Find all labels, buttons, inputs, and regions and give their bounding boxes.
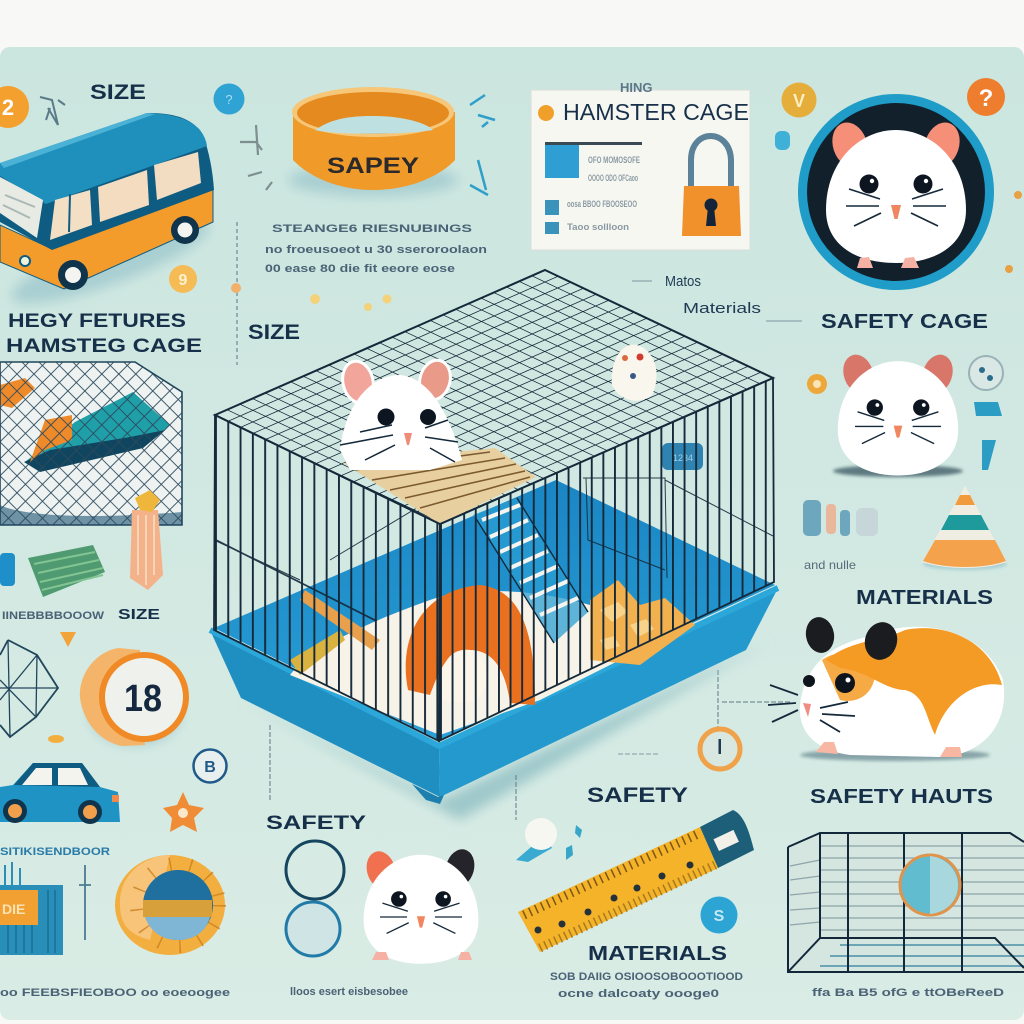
icons: right of ring	[470, 95, 495, 195]
icon: blue tag	[775, 131, 790, 150]
badge: yellow number: 9	[179, 272, 188, 289]
small label: and nulle	[804, 558, 856, 572]
card blue square	[545, 142, 579, 178]
badge: blue spiral: S	[714, 908, 725, 925]
heading: features: HAMSTEG CAGE	[6, 336, 202, 357]
info card	[531, 80, 750, 250]
small hamster	[612, 345, 657, 401]
mid-labels: Materials	[683, 300, 761, 317]
top mesh	[215, 270, 773, 524]
icon: tassel	[130, 490, 163, 590]
heading: safety centre: SAFETY	[587, 784, 688, 807]
description text: 00 ease 80 die fit eeore eose	[265, 263, 455, 275]
label: size left: SIZE	[118, 606, 160, 623]
orange stick	[300, 590, 380, 650]
blue box	[0, 862, 63, 955]
small caption under cage	[618, 753, 660, 755]
materials text: ocne dalcoaty oooge0	[558, 988, 719, 1000]
badge: blue spiral	[700, 896, 738, 934]
heading: safety hauts: SAFETY HAUTS	[810, 786, 993, 808]
description text: no froeusoeot u 30 sseroroolaon	[265, 244, 487, 256]
tray	[210, 480, 778, 804]
badge: orange 2: 2	[2, 95, 14, 120]
card text	[567, 155, 640, 232]
ladder	[473, 498, 588, 643]
card text: Taoo sollloon	[567, 222, 629, 232]
icon: blue-orange bits	[803, 500, 878, 536]
icon: sparks	[240, 125, 272, 190]
heading: features: HEGY FETURES	[8, 311, 186, 332]
hay piece	[290, 630, 345, 675]
heading: size middle: SIZE	[248, 321, 300, 344]
label: size left	[2, 606, 160, 623]
badge: small orange	[807, 374, 827, 394]
ring text: SAPEY	[327, 153, 419, 178]
bottom caption left: oo FEEBSFIEOBOO oo eoeoogee	[0, 987, 230, 999]
badge: blue outlined	[194, 750, 226, 782]
materials text	[550, 971, 743, 1000]
label: left small blue: SITIKISENDBOOR	[0, 846, 110, 858]
badge: yellow number	[169, 265, 197, 293]
wooden plank	[343, 448, 536, 524]
heading: features	[6, 311, 202, 357]
badge: orange question	[967, 78, 1005, 116]
heading: safety left: SAFETY	[266, 813, 366, 834]
blue tag: 1234	[673, 453, 693, 463]
mid-labels	[632, 273, 802, 321]
card text: OOOO ODO OFCaoo	[588, 173, 638, 183]
description text: STEANGE6 RIESNUBINGS	[272, 223, 472, 235]
orange hamster	[768, 615, 1004, 761]
blue tag	[662, 443, 703, 470]
small marks: right edge	[1005, 191, 1022, 273]
badge: orange 2	[0, 86, 29, 128]
heading: safety cage: SAFETY CAGE	[821, 311, 988, 333]
icon: small sprig	[40, 97, 65, 125]
number ring	[80, 648, 186, 746]
main cage	[210, 270, 778, 820]
bottom caption right: ffa Ba B5 ofG e ttOBeReeD	[812, 987, 1004, 999]
hamster portrait	[798, 94, 994, 290]
small cage	[788, 833, 1024, 972]
card text: oosa BBOO FBOOSEOO	[567, 199, 637, 209]
mid-labels: Matos	[665, 273, 701, 290]
card text: OFO MOMOSOFE	[588, 155, 640, 165]
icon: small pin	[79, 865, 91, 940]
materials text: SOB DAIIG OSIOOSOBOOOTIOOD	[550, 971, 743, 983]
cage hamster	[339, 357, 462, 470]
connector: bottom	[270, 725, 516, 820]
number ring: 18	[124, 678, 162, 720]
back wire walls	[214, 478, 773, 653]
badge: pale circle	[969, 356, 1003, 390]
badge: orange question: ?	[979, 85, 993, 112]
icon: bus	[0, 113, 216, 319]
round porthole	[900, 855, 960, 915]
icon: padlock	[682, 136, 741, 236]
badge: yellow v: V	[793, 91, 805, 111]
badge: blue outlined: B	[204, 759, 216, 776]
icon: star	[163, 792, 204, 832]
blue box: DIE	[2, 901, 25, 917]
heading: materials centre: MATERIALS	[588, 942, 727, 965]
car	[0, 763, 120, 824]
icon: white knob	[516, 818, 582, 862]
icon: dot orange	[48, 735, 64, 743]
net panel	[0, 362, 182, 525]
hamster: right	[833, 351, 963, 477]
badge: blue circle	[214, 84, 244, 114]
bedding	[290, 591, 680, 735]
front bars: right	[439, 378, 774, 741]
description text	[265, 223, 487, 275]
icon: key ring	[286, 841, 344, 956]
card kicker: HING	[620, 80, 652, 95]
card rule	[545, 142, 642, 145]
card small icons	[545, 200, 559, 234]
icon: small gauge	[700, 729, 740, 769]
decorative dots	[310, 294, 392, 311]
badge: yellow v	[782, 82, 816, 118]
badge: blue circle: ?	[225, 92, 233, 107]
heading: materials right: MATERIALS	[856, 587, 993, 609]
icon: wire shape	[0, 640, 58, 737]
icon: blue marks	[974, 402, 1002, 470]
icon: striped cone	[922, 486, 1007, 570]
tray shadow	[241, 640, 770, 820]
food pile	[590, 580, 695, 665]
orange tunnel	[406, 585, 535, 705]
dashed line	[231, 222, 241, 365]
hamster bottom	[363, 845, 478, 964]
front bars: left	[214, 415, 440, 741]
safety ring	[288, 87, 458, 196]
log ring	[115, 855, 225, 955]
icon: green block	[28, 545, 105, 597]
card bullet	[538, 105, 554, 121]
card title: HAMSTER CAGE	[563, 99, 749, 125]
connector	[718, 670, 790, 730]
tape ruler	[518, 810, 754, 952]
heading: size top: SIZE	[90, 81, 146, 104]
label: size left: IINEBBBBOOOW	[2, 610, 105, 622]
icon: blue bit	[0, 553, 15, 586]
bottom caption centre: lloos esert eisbesobee	[290, 986, 408, 998]
icon: orange pin	[60, 632, 76, 647]
